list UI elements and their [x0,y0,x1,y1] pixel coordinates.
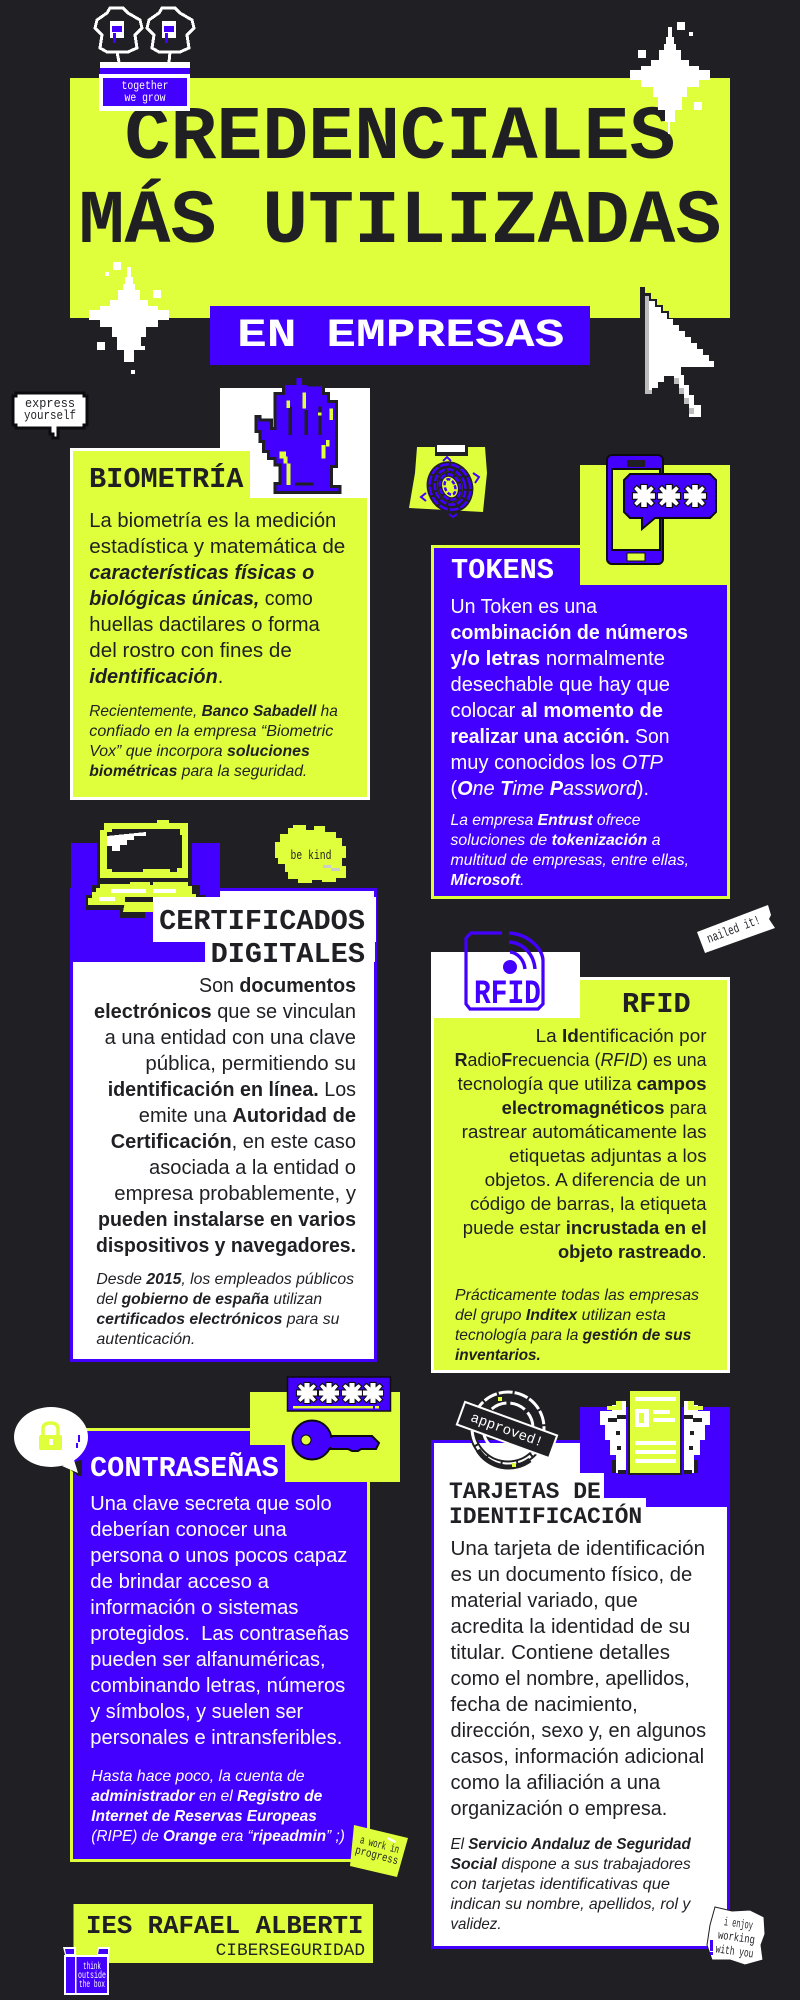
text: biometría body [89,510,345,688]
footer: school name: CIBERSEGURIDAD [216,1941,365,1961]
text: rfid body: rastrear automáticamente las [462,1121,707,1142]
text: tarjetas example: con tarjetas identificativas que [450,1876,670,1893]
text: rfid body: etiquetas adjuntas a los [509,1145,707,1166]
text: certificados body: asociada a la entidad o [149,1157,356,1179]
text: tarjetas body [450,1538,706,1820]
sticker: fingerprint [409,444,487,517]
heading: tokens: TOKENS [451,554,554,587]
icon: sparkle top right [630,22,710,134]
heading: rfid: RFID [622,988,691,1021]
sticker: a work in progress: progress [354,1844,400,1868]
panel: rfid [431,952,728,1372]
text: tokens body: desechable que hay que [450,674,670,696]
icon: approved stamp: approved! [468,1410,545,1451]
icon: password field [288,1377,390,1411]
text: biometría example: Vox” que incorpora soluciones [89,743,310,760]
text: rfid example [455,1287,699,1364]
text: certificados body: Son documentos [199,975,356,997]
text: rfid body: tecnología que utiliza campos [458,1073,707,1094]
text: tokens body: (One Time Password). [450,778,649,800]
icon: sparkle bottom left [89,262,169,374]
text: tarjetas body: acredita la identidad de su [450,1616,690,1638]
sticker: a work in progress: a work in [358,1834,400,1857]
text: rfid body: electromagnéticos para [502,1097,707,1118]
text: contraseñas body: protegidos. Las contraseñas [90,1623,349,1645]
text: tokens body: realizar una acción. Son [450,726,670,748]
text: biometría body: estadística y matemática de [89,536,345,558]
text: tokens body: Un Token es una [450,596,598,618]
heading: contraseñas: CONTRASEÑAS [90,1451,279,1485]
text: tarjetas example: Social dispone a sus trabajadores [450,1856,691,1873]
text: contraseñas example: administrador en el Registro de [91,1788,323,1805]
sticker: think outside the box: outside [78,1970,106,1982]
panel: title [70,78,730,318]
text: certificados body: pueden instalarse en varios [98,1209,356,1231]
text: tokens example: multitud de empresas, entre ellas, [450,852,689,869]
text: rfid body: puede estar incrustada en el [463,1217,707,1238]
text: certificados body [94,975,356,1257]
heading: biometría: BIOMETRÍA [89,462,244,496]
panel: biometría [72,388,370,798]
text: tarjetas example: validez. [450,1916,502,1933]
text: rfid example: del grupo Inditex utilizan esta [455,1307,666,1324]
text: tokens example: Microsoft. [450,872,524,889]
sticker: express yourself: express [25,396,75,411]
text: biometría body: del rostro con fines de [89,640,292,662]
sticker: think outside the box [63,1947,110,1994]
text: rfid example: inventarios. [455,1347,541,1364]
icon: approved stamp [457,1392,557,1467]
text: contraseñas example: Internet de Reservas Europeas [91,1808,317,1825]
text: biometría example: confiado en la empresa “Biometric [89,723,334,740]
heading: certificados digitales [159,905,365,971]
sticker: nailed it: nailed it! [705,913,763,947]
text: certificados example [96,1271,354,1348]
panel: certificados digitales [71,820,376,1360]
text: rfid body: objetos. A diferencia de un [485,1169,707,1190]
sticker: i enjoy working with you: i enjoy [723,1915,754,1933]
icon: flower pot sticker [95,8,194,111]
text: contraseñas body: Una clave secreta que solo [90,1493,332,1515]
sticker: i enjoy working with you [707,1907,765,1965]
text: certificados body: electrónicos que se vinculan [94,1001,356,1023]
text: tokens body [450,596,688,800]
heading: certificados digitales: CERTIFICADOS [159,905,365,938]
footer: school name: IES RAFAEL ALBERTI [86,1912,363,1941]
icon: flower pot sticker: we grow [124,91,166,105]
text: rfid body: objeto rastreado. [558,1241,707,1262]
text: tokens example [450,812,689,889]
text: biometría body: características físicas o [89,562,314,584]
sticker: think outside the box: the box [79,1979,105,1991]
text: rfid body: La Identificación por [536,1025,707,1046]
panel: tarjetas de identificación [432,1407,730,1948]
text: certificados body: identificación en línea. Los [108,1079,356,1101]
text: tokens body: colocar al momento de [450,700,663,722]
text: rfid example: tecnología para la gestión de sus [455,1327,692,1344]
sticker: think outside the box: think [83,1961,101,1973]
text: certificados body: a una entidad con una clave [105,1027,356,1049]
heading: tarjetas de identificación: IDENTIFICACIÓN [449,1502,642,1530]
sticker: i enjoy working with you: with you [715,1942,754,1961]
icon: glove hand [256,377,340,492]
text: tarjetas body: es un documento físico, de [450,1564,692,1586]
heading: tarjetas de identificación: TARJETAS DE [449,1479,601,1505]
sticker: be kind: be kind [290,848,332,863]
text: tokens body: muy conocidos los OTP [450,752,664,774]
text: contraseñas body: información o sistemas [90,1597,298,1619]
text: certificados body: dispositivos y navegadores. [96,1235,356,1257]
text: certificados example: certificados electrónicos para su [96,1311,340,1328]
text: rfid example: Prácticamente todas las empresas [455,1287,699,1304]
text: rfid body: código de barras, la etiqueta [470,1193,707,1214]
text: contraseñas body: de brindar acceso a [90,1571,270,1593]
text: contraseñas body: deberían conocer una [90,1519,288,1541]
sticker: be kind [275,825,346,883]
panel: tokens [432,465,730,898]
text: contraseñas body: y símbolos, y suelen ser [90,1701,303,1723]
text: tarjetas body: titular. Contiene detalles [450,1642,670,1664]
text: contraseñas body: combinando letras, números [90,1675,345,1697]
subtitle banner [210,306,590,365]
text: biometría body: biológicas únicas, como [89,588,313,610]
text: biometría body: huellas dactilares o forma [89,614,321,636]
icon: key [292,1420,379,1460]
sticker: i enjoy working with you: working [717,1929,756,1948]
text: tokens body: y/o letras normalmente [450,648,665,670]
text: rfid body: RadioFrecuencia (RFID) es una [455,1049,707,1070]
text: tokens example: La empresa Entrust ofrece [450,812,641,829]
text: biometría body: identificación. [89,666,223,688]
text: certificados example: Desde 2015, los empleados públicos [96,1271,354,1288]
icon: laptop [86,820,205,918]
text: tarjetas body: fecha de nacimiento, [450,1694,638,1716]
icon: pixel cursor [640,287,714,417]
text: contraseñas example: (RIPE) de Orange era “ripeadmin” ;) [91,1828,345,1845]
text: contraseñas body: persona o unos pocos capaz [90,1545,347,1567]
text: biometría example: biométricas para la seguridad. [89,763,307,780]
subtitle banner: EN EMPRESAS [237,312,564,358]
text: tarjetas body: como el nombre, apellidos, [450,1668,690,1690]
text: tarjetas body: material variado, que [450,1590,638,1612]
icon: rfid tag [466,933,543,1014]
text: tokens body: combinación de números [450,622,688,644]
heading: certificados digitales: DIGITALES [211,938,365,971]
text: contraseñas body: pueden ser alfanuméricas, [90,1649,326,1671]
panel: contraseñas [72,1392,400,1860]
icon: rfid tag: RFID [474,976,541,1014]
text: certificados example: del gobierno de españa utilizan [96,1291,322,1308]
heading: tarjetas de identificación [449,1479,642,1530]
sticker: lock bubble [14,1407,88,1476]
icon: phone with password bubble [607,455,716,564]
icon: flower pot sticker: together [122,79,168,93]
text: biometría body: La biometría es la medición [89,510,336,532]
text: tarjetas example [450,1836,692,1933]
text: biometría example [89,703,338,780]
text: tarjetas body: Una tarjeta de identificación [450,1538,705,1560]
text: certificados body: empresa probablemente, y [114,1183,356,1205]
text: contraseñas example [91,1768,345,1845]
text: tarjetas body: dirección, sexo y, en algunos [450,1720,706,1742]
text: rfid body [455,1025,707,1262]
footer: school name [74,1904,373,1963]
text: tarjetas example: El Servicio Andaluz de Seguridad [450,1836,691,1853]
text: tarjetas body: organización o empresa. [450,1798,667,1820]
text: contraseñas example: Hasta hace poco, la cuenta de [91,1768,305,1785]
icon: id cards [600,1391,710,1475]
text: certificados body: pública, permitiendo su [145,1053,356,1075]
sticker: express yourself: yourself [24,408,76,423]
text: certificados body: emite una Autoridad de [139,1105,356,1127]
sticker: a work in progress [350,1825,408,1877]
text: biometría example: Recientemente, Banco Sabadell ha [89,703,338,720]
text: tokens example: soluciones de tokenización a [450,832,661,849]
text: certificados body: Certificación, en este caso [111,1131,356,1153]
text: tarjetas body: como la afiliación a una [450,1772,661,1794]
title [79,94,721,265]
title: MÁS UTILIZADAS [79,178,721,265]
text: contraseñas body: personales e intransferibles. [90,1727,342,1749]
text: contraseñas body [90,1493,349,1749]
sticker: express yourself [13,393,87,438]
text: tarjetas example: indican su nombre, apellidos, rol y [450,1896,692,1913]
text: certificados example: autenticación. [96,1331,195,1348]
title: CREDENCIALES [125,94,675,181]
text: tarjetas body: casos, información adicional [450,1746,704,1768]
